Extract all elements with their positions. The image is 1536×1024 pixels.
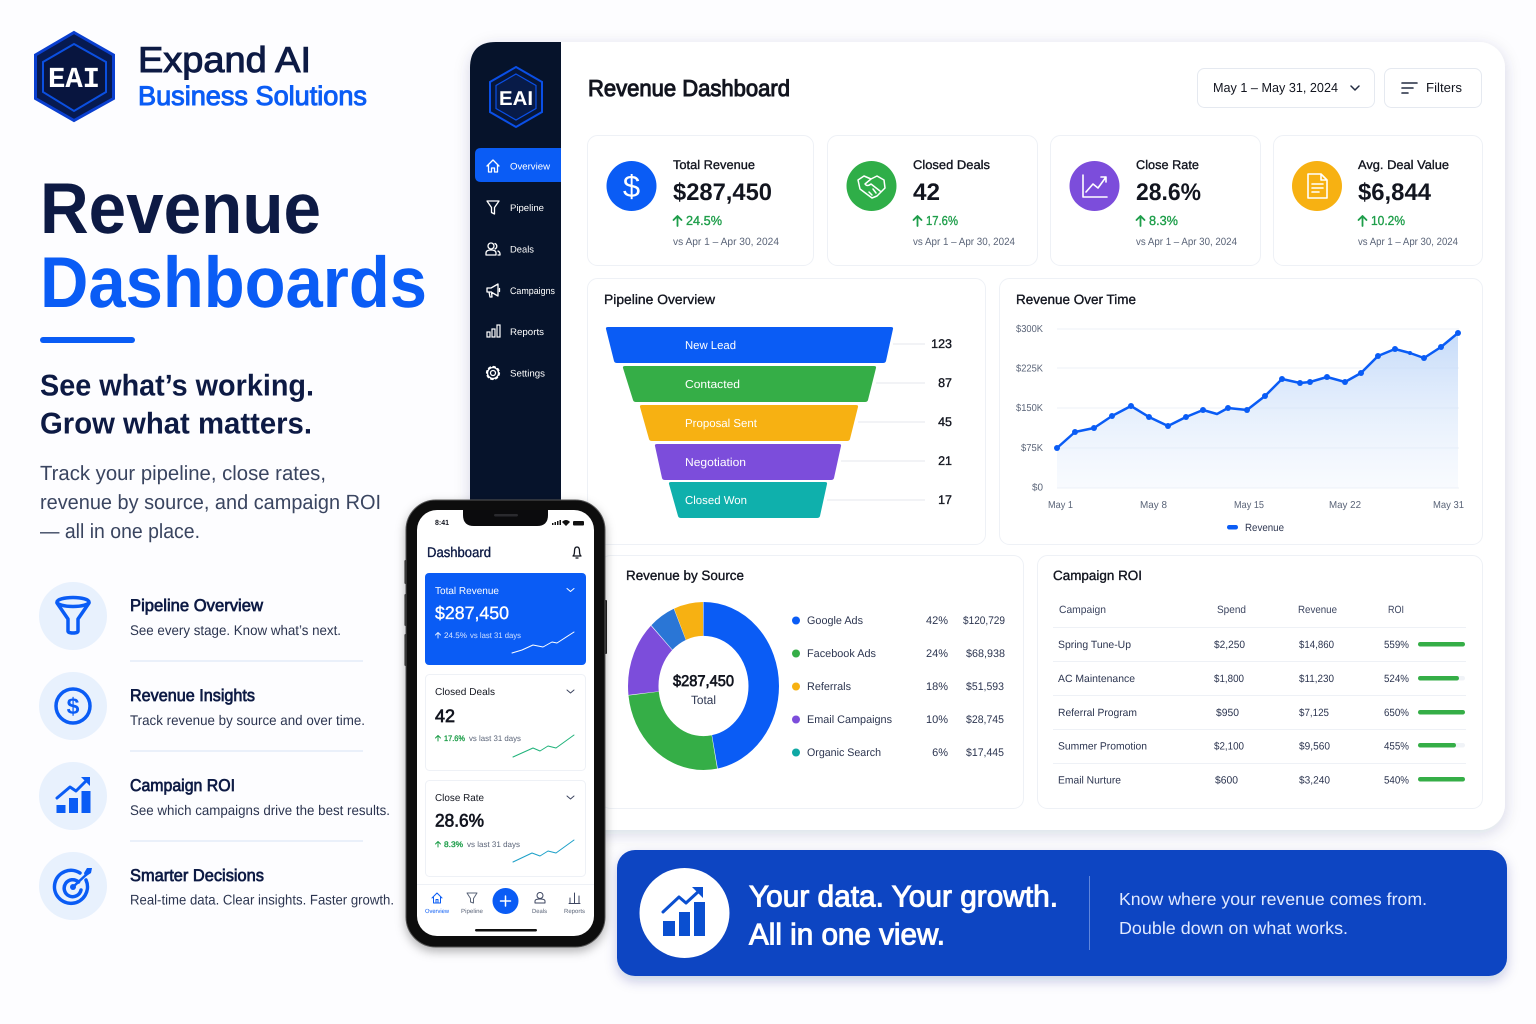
- phone card: closed deals: 17.6%: [444, 734, 465, 743]
- panel: pipeline overview: [588, 278, 986, 544]
- dashboard window: [470, 42, 1505, 830]
- panel: campaign ROI: Campaign ROI: [1053, 568, 1142, 583]
- dashboard heading: Revenue Dashboard: [588, 75, 790, 101]
- source legend: Email Campaigns: [807, 714, 892, 726]
- tab: reports: [564, 893, 585, 915]
- row: spring tune-up: $14,860: [1299, 639, 1334, 651]
- y axis labels: $75K: [1021, 443, 1043, 454]
- x axis labels: [1048, 500, 1464, 511]
- source legend: 10%: [926, 714, 948, 726]
- KPI: average deal value: $6,844: [1358, 179, 1432, 206]
- funnel stage: contacted: 87: [938, 376, 952, 390]
- KPI: closed deals: vs Apr 1 – Apr 30, 2024: [913, 236, 1015, 248]
- tab: reports: Reports: [564, 908, 585, 915]
- source legend: 18%: [926, 681, 948, 693]
- table header: [1059, 604, 1404, 616]
- funnel stage: negotiation: Negotiation: [685, 457, 746, 469]
- KPI: close rate: Close Rate: [1136, 158, 1199, 172]
- phone card: close rate: vs last 31 days: [467, 840, 520, 849]
- source legend: [792, 615, 1005, 759]
- KPI: closed deals: 42: [913, 179, 940, 206]
- panel: revenue by source: Revenue by Source: [626, 568, 744, 583]
- KPI: total revenue: $287,450: [673, 179, 772, 206]
- feature: pipeline overview: See every stage. Know what’s next.: [130, 622, 341, 638]
- tab: deals: Deals: [532, 908, 547, 915]
- source legend: Referrals: [807, 681, 851, 693]
- nav: reports: Reports: [510, 327, 544, 338]
- tab: overview: Overview: [425, 908, 450, 915]
- source legend: $17,445: [966, 747, 1004, 759]
- row: AC maintenance: $1,800: [1214, 673, 1244, 685]
- source legend: $68,938: [966, 648, 1005, 660]
- phone card: total revenue: $287,450: [435, 603, 509, 623]
- nav: settings: [487, 367, 545, 380]
- table header: Revenue: [1298, 604, 1337, 616]
- source legend: $28,745: [966, 714, 1004, 726]
- brand tagline: Business Solutions: [138, 81, 367, 111]
- KPI: closed deals: 17.6%: [926, 213, 958, 228]
- subheading: Grow what matters.: [40, 408, 312, 440]
- panel: revenue by source: [600, 556, 1024, 808]
- source legend: $120,729: [963, 615, 1005, 627]
- chart legend: [1227, 522, 1284, 534]
- nav: pipeline: [487, 201, 544, 214]
- banner headline: All in one view.: [749, 918, 945, 952]
- phone card: close rate: 28.6%: [435, 810, 484, 830]
- icon: bell: [573, 547, 581, 558]
- funnel stage: new lead: New Lead: [685, 340, 736, 352]
- KPI: closed deals: [828, 136, 1038, 266]
- phone card: close rate: [426, 780, 586, 876]
- phone card: closed deals: vs last 31 days: [469, 734, 521, 743]
- KPI: close rate: vs Apr 1 – Apr 30, 2024: [1136, 236, 1237, 248]
- icon: EAI hexagon: EAI: [48, 63, 100, 96]
- funnel stage: proposal sent: [640, 405, 952, 441]
- tab: pipeline: Pipeline: [461, 908, 484, 915]
- main title: [40, 169, 427, 323]
- nav: reports: [487, 325, 544, 338]
- date range button: May 1 – May 31, 2024: [1213, 80, 1338, 95]
- source legend: 42%: [926, 615, 948, 627]
- nav: overview: [487, 160, 550, 172]
- feature list: [39, 582, 394, 920]
- feature: pipeline overview: Pipeline Overview: [130, 596, 264, 615]
- nav: deals: Deals: [510, 244, 534, 256]
- row: email nurture: [1058, 774, 1465, 786]
- phone card: close rate: Close Rate: [435, 793, 484, 804]
- subheading: See what’s working.: [40, 370, 314, 402]
- row: spring tune-up: Spring Tune-Up: [1058, 639, 1131, 651]
- date range button: [1198, 68, 1374, 108]
- phone card: total revenue: vs last 31 days: [470, 631, 521, 640]
- KPI: total revenue: vs Apr 1 – Apr 30, 2024: [673, 236, 779, 248]
- source legend: Facebook Ads: [807, 648, 876, 660]
- phone status bar: 8:41: [435, 518, 449, 527]
- funnel stage: contacted: [623, 366, 952, 402]
- KPI: average deal value: Avg. Deal Value: [1358, 158, 1449, 172]
- KPI: closed deals: Closed Deals: [913, 158, 990, 172]
- KPI: total revenue: Total Revenue: [673, 158, 755, 172]
- table header: ROI: [1388, 604, 1404, 616]
- row: summer promotion: $9,560: [1299, 740, 1330, 752]
- KPI: average deal value: [1274, 136, 1482, 266]
- panel: revenue over time: [1000, 278, 1482, 544]
- banner headline: [749, 880, 1058, 952]
- KPI: total revenue: [588, 136, 814, 266]
- funnel stage: closed won: 17: [938, 493, 952, 507]
- row: AC maintenance: AC Maintenance: [1058, 673, 1135, 685]
- funnel stage: proposal sent: 45: [938, 415, 952, 429]
- phone mockup: [404, 500, 607, 947]
- row: AC maintenance: $11,230: [1299, 673, 1334, 685]
- row: referral program: 650%: [1384, 707, 1409, 719]
- feature: pipeline overview: [39, 582, 341, 650]
- funnel stage: new lead: [606, 327, 952, 363]
- tab: pipeline: [461, 893, 484, 915]
- icon: sidebar logo: EAI: [499, 88, 533, 110]
- banner supporting text: [1119, 889, 1427, 938]
- phone card: closed deals: [426, 674, 586, 770]
- feature: smarter decisions: [39, 852, 394, 920]
- KPI: close rate: 28.6%: [1136, 179, 1201, 206]
- table header: Spend: [1217, 604, 1246, 616]
- phone bottom navigation: [417, 884, 594, 915]
- nav: deals: [486, 243, 534, 256]
- feature: smarter decisions: Smarter Decisions: [130, 866, 264, 885]
- funnel stage: negotiation: 21: [938, 454, 952, 468]
- row: spring tune-up: [1058, 639, 1465, 651]
- feature: campaign ROI: See which campaigns drive the best results.: [130, 802, 390, 818]
- filters button: [1384, 68, 1482, 108]
- subheading: [40, 370, 314, 440]
- donut chart: $287,450: [673, 673, 734, 690]
- y axis labels: $150K: [1016, 403, 1043, 414]
- feature: campaign ROI: [39, 762, 390, 830]
- panel: revenue over time: Revenue Over Time: [1016, 292, 1136, 307]
- row: referral program: $7,125: [1299, 707, 1329, 719]
- funnel stage: closed won: Closed Won: [685, 495, 747, 507]
- feature: revenue insights: $: [67, 693, 80, 719]
- funnel stage: contacted: Contacted: [685, 379, 740, 391]
- main title: Dashboards: [40, 243, 427, 323]
- icon: EAI hexagon: [36, 32, 114, 120]
- funnel stage: closed won: [669, 482, 952, 518]
- KPI: total revenue: $: [623, 169, 640, 204]
- icon: growth chart: [640, 868, 730, 958]
- table header: Campaign: [1059, 604, 1106, 616]
- y axis labels: [1016, 324, 1043, 494]
- icon: sidebar logo: [490, 67, 542, 127]
- chart legend: Revenue: [1245, 522, 1284, 534]
- row: AC maintenance: 524%: [1384, 673, 1409, 685]
- row: spring tune-up: 559%: [1384, 639, 1409, 651]
- row: summer promotion: 455%: [1384, 740, 1409, 752]
- row: spring tune-up: $2,250: [1214, 639, 1245, 651]
- banner supporting text: Know where your revenue comes from.: [1119, 889, 1427, 909]
- phone card: total revenue: 24.5%: [444, 631, 467, 640]
- row: referral program: $950: [1216, 707, 1239, 719]
- feature: revenue insights: [39, 672, 365, 740]
- KPI: close rate: 8.3%: [1149, 213, 1178, 228]
- phone card: total revenue: [425, 573, 586, 665]
- nav: pipeline: Pipeline: [510, 203, 544, 214]
- KPI: total revenue: 24.5%: [686, 213, 722, 228]
- nav: campaigns: [487, 284, 555, 297]
- phone card: total revenue: Total Revenue: [435, 586, 499, 597]
- funnel stage: negotiation: [655, 444, 952, 480]
- tab: add button: [492, 888, 518, 914]
- row: AC maintenance: [1058, 673, 1465, 685]
- x axis labels: May 15: [1234, 500, 1264, 511]
- row: summer promotion: $2,100: [1214, 740, 1244, 752]
- donut chart: Total: [691, 693, 716, 707]
- nav: overview: Overview: [510, 162, 550, 172]
- phone card: closed deals: Closed Deals: [435, 687, 495, 698]
- row: summer promotion: Summer Promotion: [1058, 740, 1147, 752]
- panel: sidebar: [470, 42, 561, 510]
- filters button: Filters: [1426, 80, 1463, 95]
- tab: overview: [425, 893, 450, 915]
- y axis labels: $300K: [1016, 324, 1043, 335]
- source legend: Google Ads: [807, 615, 863, 627]
- line chart: [1054, 329, 1461, 488]
- source legend: $51,593: [966, 681, 1004, 693]
- source legend: Organic Search: [807, 747, 881, 759]
- row: referral program: Referral Program: [1058, 707, 1137, 719]
- y axis labels: $0: [1032, 482, 1043, 494]
- banner supporting text: Double down on what works.: [1119, 918, 1348, 938]
- intro paragraph: [40, 462, 381, 543]
- phone card: closed deals: 42: [435, 706, 455, 726]
- funnel stage: new lead: 123: [931, 337, 952, 351]
- title underline: [40, 337, 135, 343]
- feature: revenue insights: Track revenue by source and over time.: [130, 712, 365, 728]
- phone heading: Dashboard: [427, 544, 491, 560]
- KPI: average deal value: 10.2%: [1371, 213, 1405, 228]
- row: email nurture: $3,240: [1299, 774, 1330, 786]
- x axis labels: May 8: [1140, 500, 1167, 511]
- nav: campaigns: Campaigns: [510, 286, 555, 297]
- nav: settings: Settings: [510, 368, 545, 380]
- banner: [617, 850, 1507, 976]
- main title: Revenue: [40, 169, 321, 249]
- x axis labels: May 1: [1048, 500, 1073, 511]
- row: referral program: [1058, 707, 1465, 719]
- panel: pipeline overview: Pipeline Overview: [604, 292, 715, 307]
- KPI: average deal value: vs Apr 1 – Apr 30, 2024: [1358, 236, 1458, 248]
- x axis labels: May 31: [1433, 500, 1464, 511]
- donut chart: [643, 619, 764, 753]
- brand name: Expand AI: [138, 39, 311, 80]
- source legend: 6%: [932, 747, 948, 759]
- funnel stage: proposal sent: Proposal Sent: [685, 418, 758, 430]
- brand logo: [36, 32, 367, 120]
- x axis labels: May 22: [1329, 500, 1361, 511]
- phone status bar: [435, 518, 584, 527]
- source legend: 24%: [926, 648, 948, 660]
- intro paragraph: revenue by source, and campaign ROI: [40, 491, 381, 514]
- banner headline: Your data. Your growth.: [749, 880, 1058, 914]
- row: email nurture: Email Nurture: [1058, 774, 1121, 786]
- tab: deals: [532, 892, 547, 915]
- nav active highlight: [475, 148, 561, 182]
- row: summer promotion: [1058, 740, 1465, 752]
- KPI: close rate: [1050, 136, 1260, 266]
- intro paragraph: — all in one place.: [40, 520, 200, 543]
- y axis labels: $225K: [1016, 364, 1043, 374]
- phone card: close rate: 8.3%: [444, 840, 463, 849]
- feature: revenue insights: Revenue Insights: [130, 686, 255, 705]
- row: email nurture: 540%: [1384, 774, 1409, 786]
- intro paragraph: Track your pipeline, close rates,: [40, 462, 326, 485]
- feature: smarter decisions: Real-time data. Clear insights. Faster growth.: [130, 892, 394, 908]
- row: email nurture: $600: [1215, 774, 1238, 786]
- feature: campaign ROI: Campaign ROI: [130, 776, 235, 795]
- panel: campaign ROI: [1038, 556, 1482, 808]
